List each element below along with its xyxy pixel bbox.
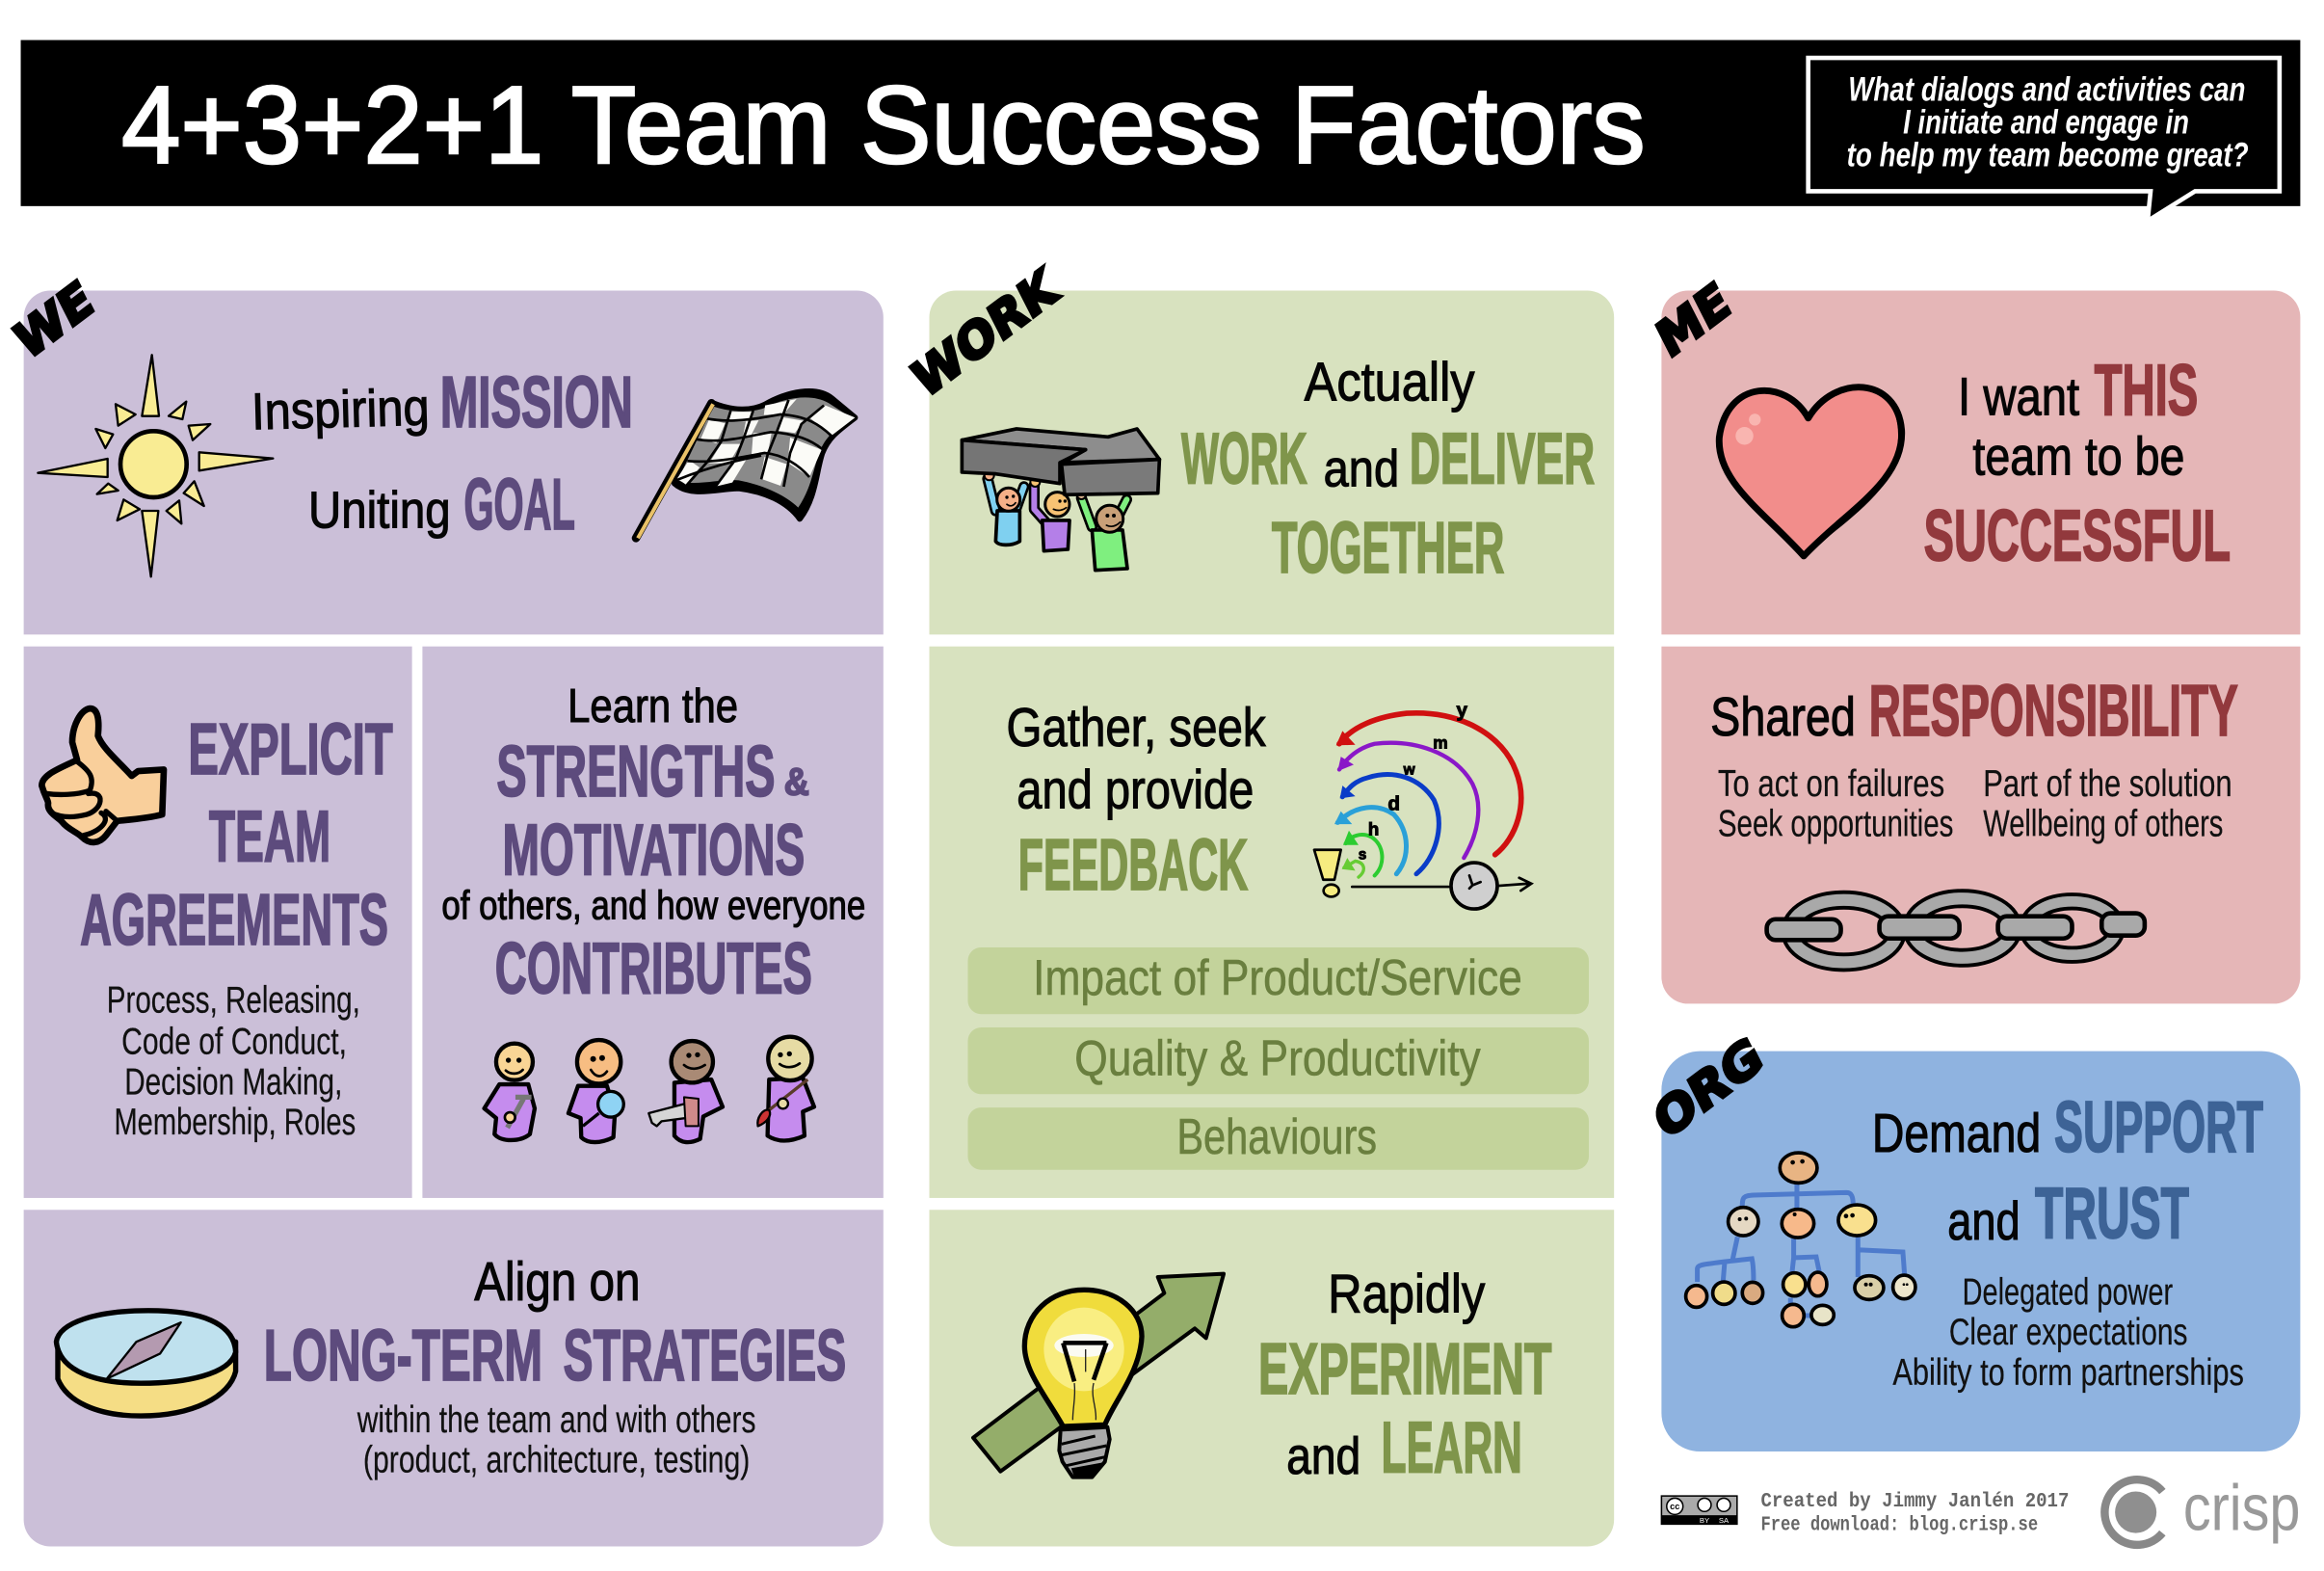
text: agreement topics xyxy=(107,980,360,1143)
text: work and deliver: WORK xyxy=(1181,418,1307,499)
heading: explicit team agreements xyxy=(80,708,393,960)
bar: impact of product / service: Impact of Product/Service xyxy=(1033,950,1522,1006)
heading: strengths and motivations xyxy=(496,731,809,891)
bar: quality and productivity: Quality & Productivity xyxy=(1074,1030,1481,1086)
heading: together: TOGETHER xyxy=(1272,507,1504,588)
text: strategy scope xyxy=(357,1399,756,1481)
heading: shared responsibility: Shared xyxy=(1710,686,1856,748)
panel: explicit team agreements xyxy=(24,647,412,1198)
badge: we: WE xyxy=(7,269,101,371)
text: org needs: Clear expectations xyxy=(1949,1312,2187,1353)
icon: four team members with tools xyxy=(485,1037,814,1142)
icon: compass xyxy=(56,1311,236,1416)
chart: feedback loops from second to year: m xyxy=(1433,733,1448,753)
text: uniting goal xyxy=(308,464,575,545)
panel: shared responsibility xyxy=(1661,647,2300,1003)
logo: crisp xyxy=(2104,1473,2300,1545)
panel: we - mission and goal xyxy=(24,291,884,634)
text: strategy scope: within the team and with others xyxy=(357,1399,756,1441)
text: agreement topics: Membership, Roles xyxy=(114,1102,356,1143)
chart: feedback loops from second to year: h xyxy=(1368,819,1379,839)
text: org needs: Ability to form partnerships xyxy=(1892,1352,2244,1394)
chart: feedback loops from second to year: d xyxy=(1387,793,1400,815)
panel: me - successful xyxy=(1661,291,2300,634)
text: inspiring mission xyxy=(251,361,633,442)
text: i want this: I want xyxy=(1958,367,2079,427)
logo: crisp: crisp xyxy=(2183,1473,2300,1545)
text: and learn xyxy=(1286,1407,1522,1488)
text: responsibility list: Wellbeing of others xyxy=(1983,804,2223,845)
text: credit: Created by Jimmy Janlén 2017 xyxy=(1760,1490,2069,1513)
text: i want this xyxy=(1958,350,2198,431)
heading: explicit team agreements: AGREEMENTS xyxy=(80,879,388,960)
text: agreement topics: Code of Conduct, xyxy=(121,1022,347,1063)
panel: strengths and motivations xyxy=(422,647,884,1198)
icon: team carrying arrow xyxy=(962,429,1159,571)
icon: checkered flag xyxy=(636,391,855,538)
text: work and deliver: DELIVER xyxy=(1410,418,1595,499)
footer xyxy=(1661,1473,2300,1545)
icon: creative commons badge: cc xyxy=(1670,1502,1679,1511)
text: work and deliver: and xyxy=(1324,440,1399,498)
text: agreement topics: Decision Making, xyxy=(124,1061,342,1103)
icon: heart xyxy=(1719,387,1904,556)
heading: explicit team agreements: TEAM xyxy=(209,796,330,877)
icon: chain xyxy=(1767,898,2145,962)
icon: sun xyxy=(38,355,273,576)
panel: org - support and trust xyxy=(1661,1052,2300,1451)
text: and trust: TRUST xyxy=(2035,1172,2189,1253)
header bar xyxy=(21,40,2300,221)
text: responsibility list xyxy=(1718,763,2232,845)
heading: long-term strategies: STRATEGIES xyxy=(564,1315,846,1396)
text: responsibility list: Seek opportunities xyxy=(1718,804,1953,845)
bar: behaviours xyxy=(967,1107,1589,1170)
heading: strengths and motivations: STRENGTHS xyxy=(496,731,776,812)
bar: quality and productivity xyxy=(967,1027,1589,1094)
callout: speech bubble question xyxy=(1809,58,2280,221)
text: and learn: LEARN xyxy=(1382,1407,1522,1488)
heading: long-term strategies: LONG-TERM xyxy=(264,1315,542,1396)
text: gather, seek and provide: Gather, seek xyxy=(1006,697,1266,759)
badge: org: ORG xyxy=(1646,1025,1771,1151)
text: and trust xyxy=(1947,1172,2189,1253)
text: inspiring mission: Inspiring xyxy=(251,379,430,440)
text: inspiring mission: MISSION xyxy=(440,361,633,442)
text: align on: Align on xyxy=(474,1251,641,1313)
text: demand support: Demand xyxy=(1872,1103,2041,1164)
text: org needs xyxy=(1892,1272,2244,1394)
text: strategy scope: (product, architecture, testing) xyxy=(363,1440,750,1481)
panel: experiment and learn xyxy=(929,1210,1614,1546)
icon: org chart xyxy=(1686,1153,1915,1327)
panel: work and deliver together xyxy=(929,291,1614,634)
text: credit: Free download: blog.crisp.se xyxy=(1760,1514,2038,1537)
text: demand support xyxy=(1872,1086,2263,1167)
text: gather, seek and provide xyxy=(1006,697,1266,820)
panel: feedback xyxy=(929,647,1614,1198)
heading: feedback: FEEDBACK xyxy=(1018,824,1248,905)
chart: feedback loops from second to year xyxy=(1314,699,1531,909)
text: agreement topics: Process, Releasing, xyxy=(107,980,360,1022)
text: responsibility list: To act on failures xyxy=(1718,763,1944,805)
heading: experiment: EXPERIMENT xyxy=(1258,1328,1552,1409)
text: rapidly: Rapidly xyxy=(1328,1263,1486,1324)
chart: feedback loops from second to year: w xyxy=(1403,761,1415,778)
text: uniting goal: Uniting xyxy=(308,482,451,540)
text: i want this: THIS xyxy=(2095,350,2198,431)
heading: strengths and motivations: MOTIVATIONS xyxy=(502,810,805,891)
bar: behaviours: Behaviours xyxy=(1176,1109,1377,1165)
title: 4+3+2+1 Team Success Factors xyxy=(121,65,1645,187)
text: work and deliver xyxy=(1181,418,1595,499)
heading: explicit team agreements: EXPLICIT xyxy=(188,708,393,789)
text: responsibility list: Part of the solution xyxy=(1983,763,2232,805)
heading: shared responsibility xyxy=(1710,670,2238,751)
callout: speech bubble question: I initiate and engage in xyxy=(1903,103,2189,141)
heading: strengths and motivations: & xyxy=(784,761,809,804)
badge: work: WORK xyxy=(905,256,1067,410)
text: credit xyxy=(1760,1490,2069,1537)
badge: me: ME xyxy=(1649,271,1738,369)
text: of others: of others, and how everyone xyxy=(441,883,865,928)
text: team to be: team to be xyxy=(1972,426,2184,486)
icon: light bulb and rising arrow xyxy=(973,1274,1224,1478)
panel: long-term strategies xyxy=(24,1210,884,1546)
text: and trust: and xyxy=(1947,1191,2020,1251)
icon: creative commons badge: SA xyxy=(1719,1516,1730,1525)
text: learn the: Learn the xyxy=(568,679,738,732)
icon: thumbs up xyxy=(41,708,164,842)
icon: creative commons badge xyxy=(1661,1496,1737,1525)
text: gather, seek and provide: and provide xyxy=(1017,759,1254,820)
text: actually: Actually xyxy=(1305,351,1475,413)
text: org needs: Delegated power xyxy=(1963,1272,2173,1314)
chart: feedback loops from second to year: y xyxy=(1457,699,1468,721)
icon: creative commons badge: BY xyxy=(1700,1516,1709,1525)
heading: contributes: CONTRIBUTES xyxy=(495,928,812,1009)
text: uniting goal: GOAL xyxy=(463,464,575,545)
chart: feedback loops from second to year: s xyxy=(1359,847,1366,864)
text: and learn: and xyxy=(1286,1427,1360,1485)
